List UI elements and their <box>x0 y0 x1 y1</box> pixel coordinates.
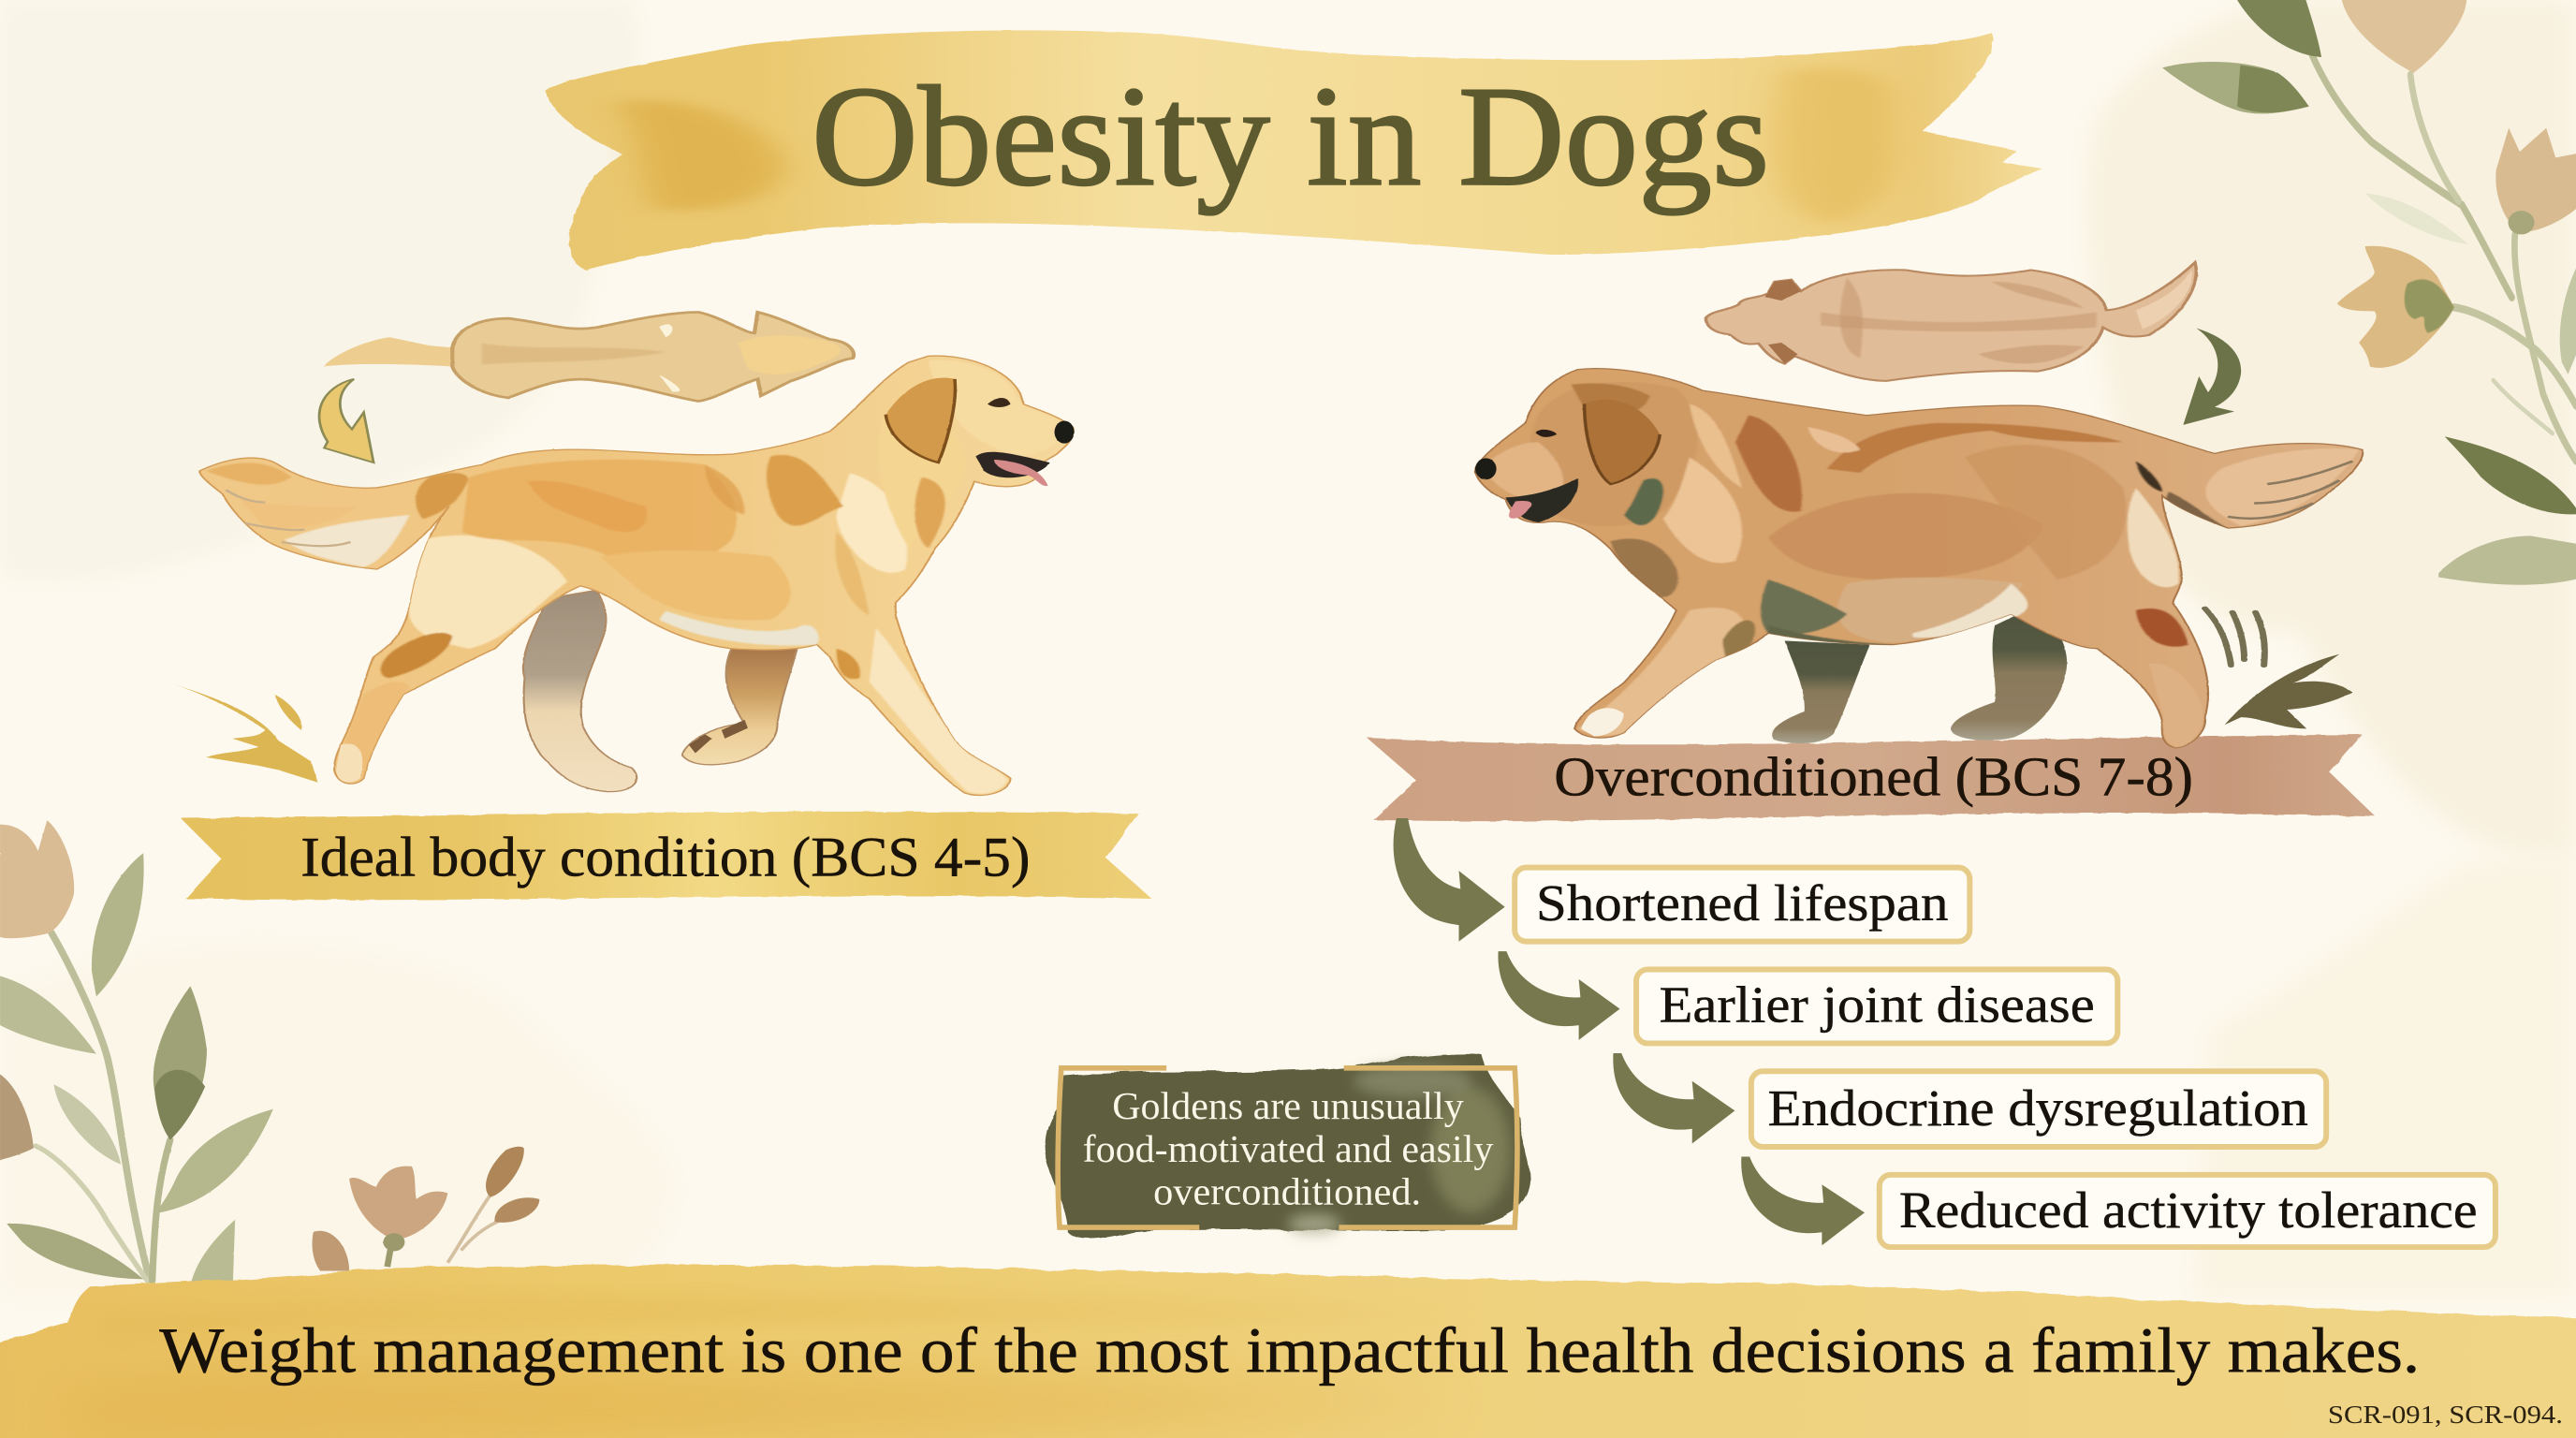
source citation: SCR-091, SCR-094. <box>2328 1401 2563 1429</box>
shoulder lights <box>659 324 680 392</box>
mouth <box>1505 478 1578 522</box>
outcome: endocrine dysregulation: Endocrine dysregulation <box>1767 1079 2308 1137</box>
arrow: to endocrine dysregulation <box>1613 1053 1734 1143</box>
tail <box>323 337 452 366</box>
floral: bottom left corner <box>0 820 539 1285</box>
far paw toes <box>689 720 748 753</box>
floral cluster <box>313 1147 539 1270</box>
over ribbon <box>1367 734 2376 821</box>
leaf stub <box>190 1220 235 1285</box>
tail <box>2136 270 2192 330</box>
head patch <box>738 335 841 374</box>
leaf big dark <box>154 986 207 1139</box>
outcome: reduced activity tolerance: Reduced activity tolerance <box>1899 1181 2478 1239</box>
leaf upper <box>92 853 144 996</box>
leaf: far right <box>2560 268 2576 374</box>
callout: golden retriever note: food-motivated and easily <box>1083 1127 1494 1170</box>
ideal label: Ideal body condition (BCS 4-5) <box>300 826 1030 888</box>
tail stripes <box>2228 462 2352 519</box>
callout frame <box>1058 1068 1517 1227</box>
flower green calyx <box>2405 279 2454 333</box>
ear outline <box>1585 404 1660 484</box>
overweight dog: top view silhouette <box>1705 262 2196 381</box>
leaf right <box>154 1109 273 1213</box>
ideal dog illustration <box>199 356 1075 795</box>
leaf small <box>53 1084 121 1165</box>
arrow: to reduced activity tolerance <box>1741 1157 1865 1245</box>
eye <box>1535 430 1557 437</box>
ear dark <box>1765 280 1801 364</box>
ideal dog: top view silhouette <box>323 312 854 402</box>
nose <box>1475 458 1497 479</box>
over label: Overconditioned (BCS 7-8) <box>1554 746 2193 807</box>
tongue <box>1509 501 1531 519</box>
overweight dog illustration <box>1475 369 2363 748</box>
spine shade <box>1821 312 2097 331</box>
leaf: long two-tone <box>2162 62 2309 113</box>
leaf: light lower <box>2438 536 2576 585</box>
callout text: Goldens are unusually <box>1112 1084 1464 1127</box>
outcome: endocrine dysregulation <box>1751 1071 2326 1147</box>
watercolor washes <box>206 360 1066 794</box>
leaf left <box>0 976 96 1054</box>
title: Obesity in Dogs <box>812 58 1769 216</box>
leaf: darker half <box>2237 65 2309 112</box>
stems <box>2312 55 2576 461</box>
body silhouette <box>1475 369 2363 748</box>
flower calyx <box>2508 211 2535 234</box>
ear outline <box>886 379 955 462</box>
callout wash <box>1046 1053 1530 1240</box>
tail feather strokes <box>226 490 351 546</box>
ideal dog: motion grass <box>173 684 317 783</box>
leaf: dark lower <box>2445 436 2576 514</box>
rear paw light <box>336 743 362 782</box>
callout: golden retriever note: overconditioned. <box>1153 1169 1421 1212</box>
bottom banner <box>0 1265 2576 1438</box>
body <box>452 312 854 402</box>
ideal ribbon <box>181 812 1151 900</box>
flower: middle <box>2337 246 2454 368</box>
outcome: earlier joint disease: Earlier joint disease <box>1660 976 2095 1034</box>
nose <box>1055 421 1075 444</box>
stems <box>36 933 170 1281</box>
outcome: earlier joint disease <box>1636 969 2117 1043</box>
spine shade <box>482 344 666 364</box>
ear <box>1585 400 1660 484</box>
far front leg <box>682 649 798 765</box>
overweight dog: curved arrow <box>2183 329 2241 425</box>
callout light washes <box>1288 1064 1510 1234</box>
body silhouette <box>199 356 1074 795</box>
flower: lower left bud <box>0 1074 34 1160</box>
tongue <box>994 460 1048 486</box>
mouth <box>975 452 1050 477</box>
takeaway message: Weight management is one of the most impactful health decisions a family makes. <box>159 1313 2420 1386</box>
overweight dog: motion lines and grass <box>2204 609 2352 728</box>
title banner <box>545 30 2042 270</box>
floral: top right corner <box>2162 0 2576 585</box>
outcome: shortened lifespan <box>1515 868 1969 942</box>
leaf: dark top <box>2237 0 2321 57</box>
faint leaf <box>2365 193 2468 244</box>
flower: right tan <box>2496 128 2576 232</box>
arrow: to shortened lifespan <box>1394 818 1505 942</box>
ear <box>886 377 955 462</box>
ideal dog: curved arrow <box>319 379 373 462</box>
arrow: to earlier joint disease <box>1498 951 1620 1040</box>
watercolor washes <box>1483 382 2359 747</box>
callout: golden retriever note <box>1046 1053 1530 1240</box>
eye <box>988 398 1011 407</box>
far front leg <box>1772 640 1870 743</box>
far hind leg <box>1951 607 2067 741</box>
outcome: shortened lifespan: Shortened lifespan <box>1536 874 1949 932</box>
leaf dark wash <box>154 1070 205 1139</box>
flower: tulip <box>0 820 74 938</box>
fold shade <box>1840 278 2084 363</box>
front paw <box>1581 708 1624 737</box>
leaf bottom <box>7 1224 143 1279</box>
far rear leg <box>523 590 637 792</box>
flower: top tan <box>2342 0 2466 73</box>
